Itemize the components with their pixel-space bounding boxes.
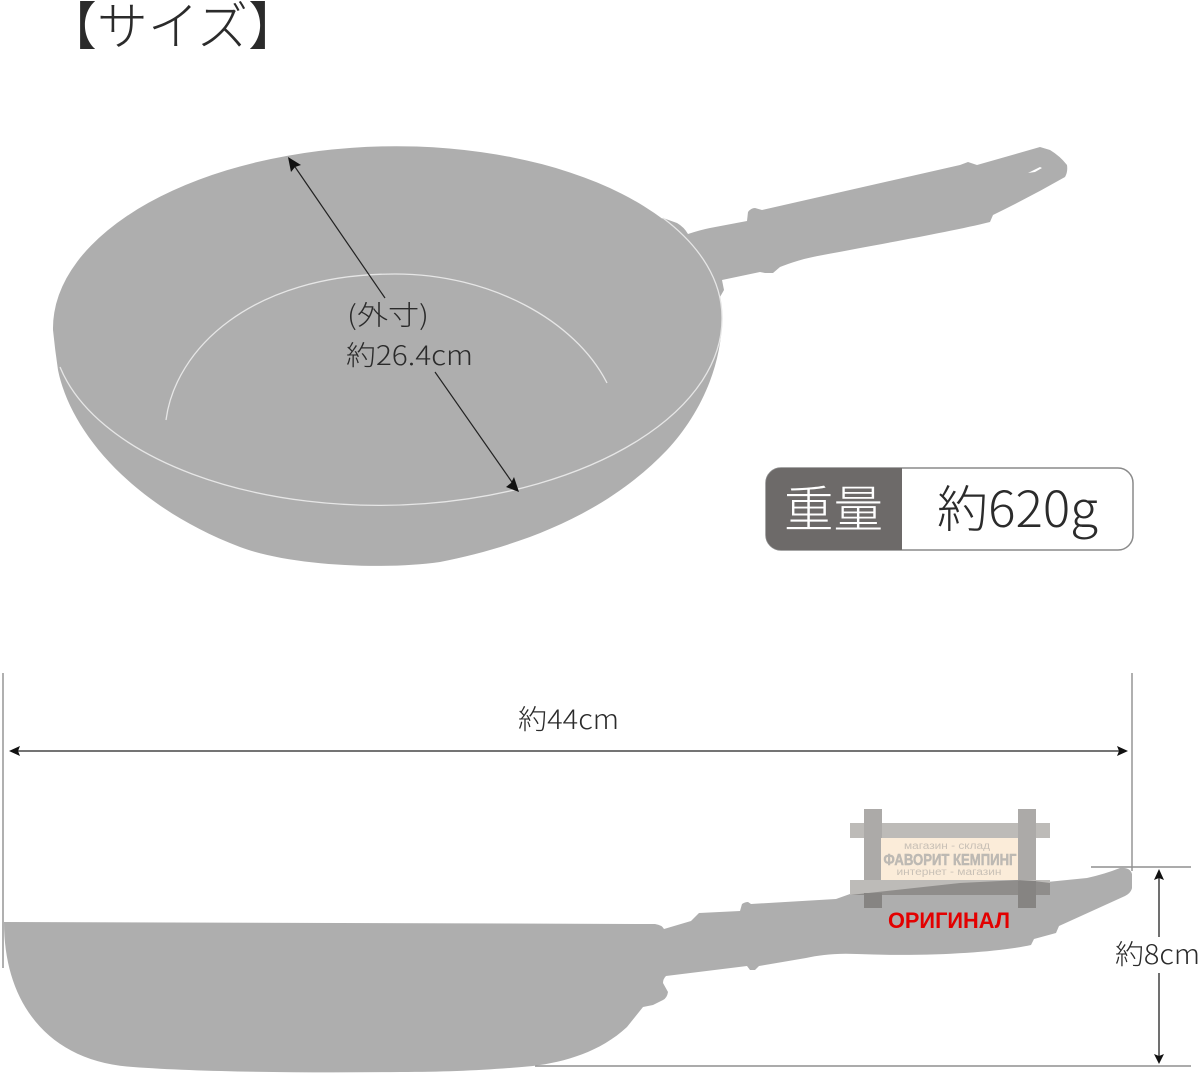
weight badge bbox=[766, 468, 1133, 550]
watermark frame: магазин - склад bbox=[904, 841, 990, 852]
side view pan illustration bbox=[4, 809, 1132, 1072]
diameter label bbox=[346, 294, 473, 373]
pan body side view bbox=[4, 868, 1132, 1072]
height arrow bbox=[1154, 869, 1164, 1064]
pan body bbox=[53, 146, 722, 566]
diameter arrow bbox=[288, 157, 519, 492]
watermark frame: ФАВОРИТ КЕМПИНГ bbox=[884, 852, 1017, 869]
watermark sign bbox=[881, 838, 1018, 880]
rim highlight bbox=[60, 218, 722, 505]
inner pan floor arc bbox=[166, 274, 607, 420]
diameter label: 約26.4cm bbox=[346, 334, 473, 373]
watermark original label: ОРИГИНАЛ bbox=[888, 908, 1010, 933]
height label: 約8cm bbox=[1115, 933, 1200, 972]
watermark frame: интернет - магазин bbox=[896, 867, 1002, 878]
pan handle top view bbox=[640, 147, 1067, 300]
weight badge label box bbox=[766, 468, 902, 550]
watermark frame bbox=[850, 809, 1050, 908]
width label: 約44cm bbox=[518, 698, 619, 737]
side view guide lines bbox=[3, 673, 1191, 1066]
diameter label: (外寸) bbox=[347, 294, 429, 333]
width arrow bbox=[9, 746, 1128, 756]
weight badge: 約620g bbox=[937, 470, 1098, 542]
weight badge: 重量 bbox=[784, 470, 883, 542]
top view pan illustration bbox=[53, 146, 1067, 566]
